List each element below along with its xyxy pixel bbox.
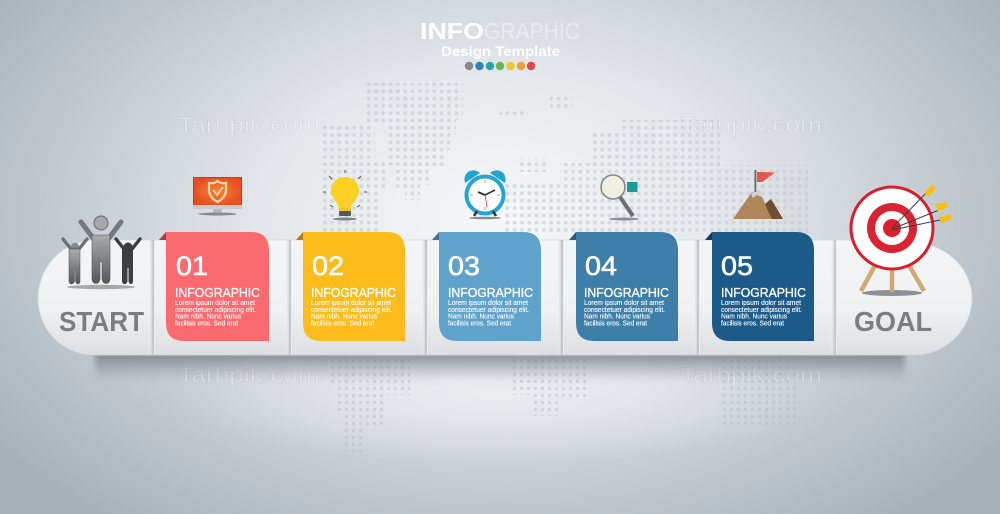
- card 4: Lorem ipsum dolor sit amet: [584, 298, 664, 307]
- title colour dots: [465, 62, 535, 70]
- card 1: 01: [176, 251, 208, 281]
- card 2: 02: [312, 251, 344, 281]
- card 3: Nam nibh. Nunc varius: [448, 312, 514, 320]
- icon: magnifying glass: [595, 175, 639, 220]
- world map dots: [320, 83, 808, 235]
- icon: group of people: [63, 216, 140, 289]
- card 4: Nam nibh. Nunc varius: [584, 312, 650, 320]
- main timeline band: [38, 240, 972, 355]
- title: INFO: [420, 18, 484, 44]
- card 2: INFOGRAPHIC: [311, 286, 396, 300]
- card 5: consectetuer adipiscing elit.: [721, 305, 802, 314]
- goal label: GOAL: [854, 306, 932, 337]
- card 5: Lorem ipsum dolor sit amet: [721, 298, 801, 307]
- card 5: INFOGRAPHIC: [721, 286, 806, 300]
- card 1: Lorem ipsum dolor sit amet: [175, 298, 255, 307]
- card 3: 03: [448, 251, 480, 281]
- title: Design Template: [441, 44, 561, 59]
- icon: alarm clock: [464, 170, 506, 219]
- icon: target with arrows: [850, 184, 951, 296]
- card 5: facilisis eros. Sed erat: [721, 318, 784, 328]
- card 4: 04: [585, 251, 617, 281]
- reflected map dots: [330, 358, 800, 452]
- card 2: Nam nibh. Nunc varius: [311, 312, 377, 320]
- card 2: Lorem ipsum dolor sit amet: [311, 298, 391, 307]
- card 1: [159, 232, 269, 341]
- card 2: consectetuer adipiscing elit.: [311, 305, 392, 314]
- card 1: facilisis eros. Sed erat: [175, 318, 238, 328]
- title: [420, 18, 580, 59]
- card 3: facilisis eros. Sed erat: [448, 318, 511, 328]
- band shadow: [95, 352, 905, 382]
- watermarks: [178, 114, 822, 387]
- card 1: INFOGRAPHIC: [175, 286, 260, 300]
- card 1: consectetuer adipiscing elit.: [175, 305, 256, 314]
- icon: mountain with flag: [733, 170, 783, 219]
- card 3: Lorem ipsum dolor sit amet: [448, 298, 528, 307]
- watermarks: Tarhpik.com: [680, 114, 822, 137]
- icon: monitor with shield: [193, 177, 242, 216]
- card 3: consectetuer adipiscing elit.: [448, 305, 529, 314]
- watermarks: Tarhpik.com: [178, 114, 320, 137]
- watermarks: Tarhpik.com: [178, 364, 320, 387]
- card 4: [569, 232, 678, 341]
- card 4: INFOGRAPHIC: [584, 286, 669, 300]
- card 2: facilisis eros. Sed erat: [311, 318, 374, 328]
- card 4: facilisis eros. Sed erat: [584, 318, 647, 328]
- start label: START: [59, 306, 144, 337]
- card 2: [296, 232, 405, 341]
- card 5: 05: [721, 251, 753, 281]
- icon: light bulb: [323, 170, 367, 220]
- title: GRAPHIC: [484, 18, 580, 44]
- card 3: INFOGRAPHIC: [448, 286, 533, 300]
- card 4: consectetuer adipiscing elit.: [584, 305, 665, 314]
- card 3: [432, 232, 541, 341]
- card 1: Nam nibh. Nunc varius: [175, 312, 241, 320]
- watermarks: Tarhpik.com: [680, 364, 822, 387]
- card 5: Nam nibh. Nunc varius: [721, 312, 787, 320]
- card 5: [705, 232, 814, 341]
